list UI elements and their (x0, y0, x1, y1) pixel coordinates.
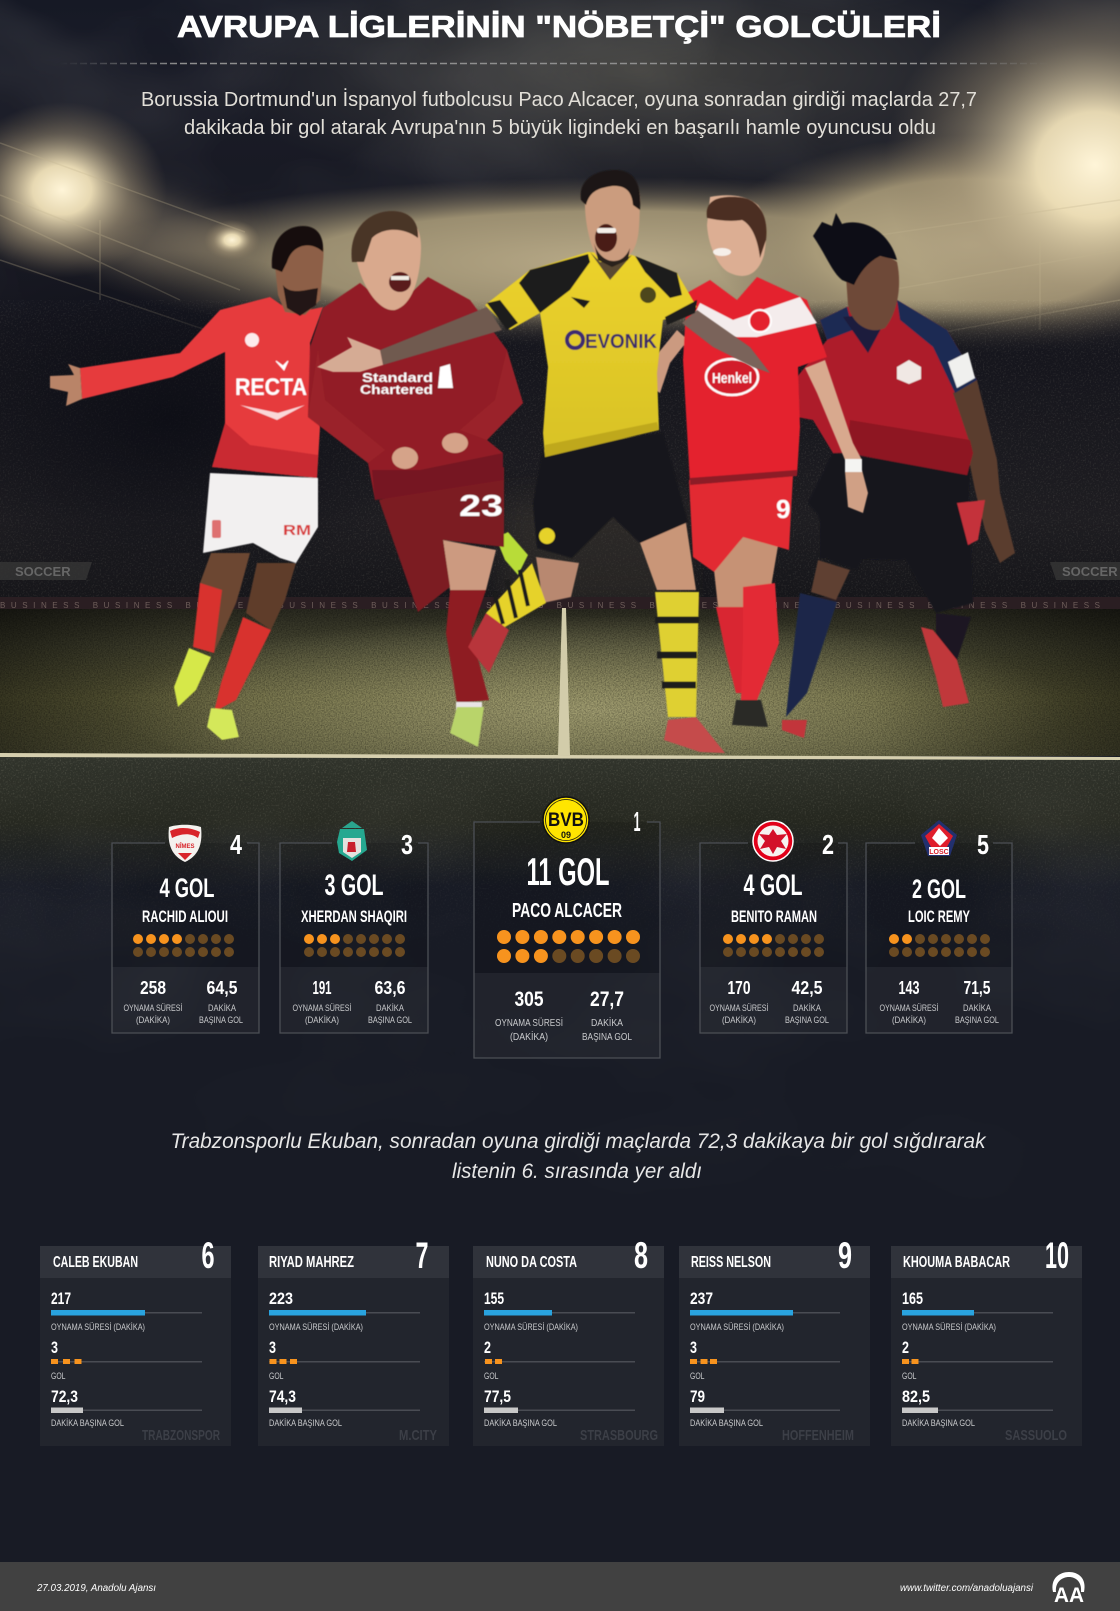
intro text (141, 88, 977, 139)
goal dots (889, 934, 990, 957)
player name: XHERDAN SHAQIRI (301, 907, 407, 926)
player: Rachid Alioui (50, 226, 324, 740)
stats (880, 977, 999, 1026)
player: Benito Raman: Henkel (712, 370, 752, 387)
icon: Nimes badge: NÎMES (175, 842, 195, 850)
player name: LOIC REMY (908, 907, 970, 926)
stats: 64,5 (206, 977, 238, 998)
bar: minutes per goal: DAKİKA BAŞINA GOL (51, 1418, 124, 1429)
club name: HOFFENHEIM (782, 1427, 854, 1444)
bar: goals (484, 1339, 635, 1382)
stats: DAKİKA (793, 1003, 822, 1014)
bar: playing time (690, 1290, 840, 1333)
stats: (DAKİKA) (510, 1030, 548, 1043)
background: stadium, lights and pitch: SOCCER (15, 564, 71, 579)
club name: TRABZONSPOR (142, 1427, 220, 1444)
twitter url: www.twitter.com/anadoluajansi (900, 1583, 1034, 1594)
icon: Nimes badge (169, 825, 201, 862)
player name: RACHID ALIOUI (142, 907, 228, 926)
bar: playing time: OYNAMA SÜRESİ (DAKİKA) (690, 1322, 784, 1333)
bar: minutes per goal: 74,3 (269, 1388, 296, 1406)
stats: 71,5 (964, 977, 990, 998)
stats: DAKİKA (208, 1003, 237, 1014)
bar: goals: GOL (690, 1371, 704, 1382)
bar: goals (51, 1339, 202, 1382)
bar: playing time (269, 1290, 420, 1333)
bar: goals: 2 (484, 1339, 491, 1357)
bar: minutes per goal (690, 1388, 840, 1429)
icon: Liverpool badge (337, 821, 367, 861)
bar: playing time: OYNAMA SÜRESİ (DAKİKA) (269, 1322, 363, 1333)
bar: goals: 3 (51, 1339, 58, 1357)
stats (124, 977, 243, 1026)
stats: OYNAMA SÜRESİ (124, 1003, 182, 1014)
panel: card rank 7 Riyad Mahrez (258, 1235, 449, 1446)
player: Loic Remy (782, 213, 1015, 738)
bar: playing time (484, 1290, 635, 1333)
player: Xherdan Shaqiri: 23 (459, 488, 503, 523)
panel: card rank 1 Paco Alcacer: 1 (634, 806, 640, 837)
icon: Lille badge: LOSC (929, 849, 949, 856)
stats: 143 (898, 977, 920, 998)
bar: minutes per goal: DAKİKA BAŞINA GOL (484, 1418, 557, 1429)
rank number: 7 (416, 1235, 428, 1276)
player name: NUNO DA COSTA (486, 1254, 577, 1271)
stats: 305 (514, 988, 544, 1011)
club name: M.CITY (399, 1427, 437, 1444)
background: stadium, lights and pitch: BUSINESS BUSINESS BUSINESS BUSINESS BUSINESS BUSINESS BUSINESS BUSINESS BUSINESS BUSINESS BUSINESS BUSINESS (0, 601, 1100, 610)
panel: card rank 6 Caleb Ekuban (40, 1235, 231, 1446)
bar: goals: GOL (902, 1371, 916, 1382)
bar: minutes per goal: 72,3 (51, 1388, 78, 1406)
panel: card rank 9 Reiss Nelson (679, 1235, 870, 1446)
player name: RIYAD MAHREZ (269, 1254, 354, 1271)
bar: goals: GOL (484, 1371, 498, 1382)
bar: goals (269, 1339, 420, 1382)
bar: playing time: 237 (690, 1290, 713, 1308)
bar: playing time (902, 1290, 1053, 1333)
club name: SASSUOLO (1005, 1427, 1067, 1444)
icon: Lille badge (921, 820, 957, 856)
bar: playing time: OYNAMA SÜRESİ (DAKİKA) (51, 1322, 145, 1333)
bar: minutes per goal: DAKİKA BAŞINA GOL (269, 1418, 342, 1429)
stats (710, 977, 829, 1026)
stats: 27,7 (590, 988, 624, 1011)
stats: 42,5 (792, 977, 822, 998)
player name: KHOUMA BABACAR (903, 1254, 1010, 1271)
icon: BVB badge: 09 (561, 830, 571, 840)
goal dots (133, 934, 234, 957)
title: AVRUPA LİGLERİNİN "NÖBETÇİ" GOLCÜLERİ (177, 9, 941, 44)
goals: 3 GOL (324, 869, 384, 902)
stats: 258 (140, 977, 166, 998)
panel: card rank 10 Khouma Babacar (891, 1235, 1082, 1446)
stats: DAKİKA (376, 1003, 405, 1014)
bar: goals: 2 (902, 1339, 909, 1357)
player: Xherdan Shaqiri: Standard (362, 370, 433, 385)
bar: playing time: 217 (51, 1290, 71, 1308)
dashed divider (60, 62, 1050, 64)
bar: playing time: 223 (269, 1290, 293, 1308)
goals: 11 GOL (526, 851, 610, 894)
date and source: 27.03.2019, Anadolu Ajansı (36, 1583, 156, 1594)
bar: playing time (51, 1290, 202, 1333)
panel: card rank 1 Paco Alcacer (474, 797, 660, 1058)
player: Benito Raman: 9 (776, 494, 790, 524)
goal dots (304, 934, 405, 957)
stats (292, 977, 412, 1026)
rank number: 8 (634, 1235, 648, 1276)
stats: 63,6 (374, 977, 406, 998)
bar: minutes per goal (51, 1388, 202, 1429)
rank number: 5 (977, 829, 989, 860)
player: Rachid Alioui: RECTA (235, 374, 307, 401)
stats: OYNAMA SÜRESİ (710, 1003, 768, 1014)
player: Rachid Alioui: RM (283, 522, 311, 539)
stats: 191 (312, 977, 332, 998)
background: stadium, lights and pitch (0, 0, 1120, 940)
player: Xherdan Shaqiri (308, 211, 528, 747)
bar: playing time: OYNAMA SÜRESİ (DAKİKA) (902, 1322, 996, 1333)
panel: card rank 4 Rachid Alioui (112, 825, 259, 1033)
bar: minutes per goal: DAKİKA BAŞINA GOL (690, 1418, 763, 1429)
bar: goals: GOL (51, 1371, 66, 1382)
panel: card rank 8 Nuno Da Costa (473, 1235, 664, 1446)
bar: minutes per goal: DAKİKA BAŞINA GOL (902, 1418, 975, 1429)
bar: playing time: OYNAMA SÜRESİ (DAKİKA) (484, 1322, 578, 1333)
stats: OYNAMA SÜRESİ (292, 1003, 352, 1014)
player: Paco Alcacer (317, 170, 770, 753)
icon: BVB badge (543, 797, 589, 843)
club name: STRASBOURG (580, 1427, 658, 1444)
bar: minutes per goal: 79 (690, 1388, 705, 1406)
stats: (DAKİKA) (892, 1015, 926, 1026)
footer bar (0, 1562, 1120, 1611)
stats: BAŞINA GOL (955, 1015, 999, 1026)
icon: AA logo: AA (1054, 1584, 1084, 1607)
panel: card rank 3 Xherdan Shaqiri (280, 821, 428, 1033)
rank number: 4 (230, 829, 242, 860)
stats: DAKİKA (591, 1016, 623, 1029)
stats: BAŞINA GOL (199, 1015, 243, 1026)
player: Paco Alcacer: EVONIK (585, 331, 658, 353)
bar: goals: GOL (269, 1371, 284, 1382)
intro text: Borussia Dortmund'un İspanyol futbolcusu Paco Alcacer, oyuna sonradan girdiği maçlarda 27,7 (141, 88, 977, 111)
player name: PACO ALCACER (512, 900, 622, 922)
players photo group (50, 170, 1015, 753)
panel: card rank 5 Loic Remy (866, 820, 1012, 1033)
icon: BVB badge: BVB (548, 810, 584, 831)
rank number: 9 (838, 1235, 852, 1276)
secondary text: Ekuban note: listenin 6. sırasında yer aldı (452, 1160, 702, 1183)
stats: BAŞINA GOL (582, 1031, 632, 1043)
bar: minutes per goal (269, 1388, 420, 1429)
player name: BENITO RAMAN (731, 907, 817, 926)
goal dots (497, 930, 640, 963)
stats: 170 (728, 977, 750, 998)
bar: minutes per goal (902, 1388, 1053, 1429)
stats: BAŞINA GOL (785, 1015, 829, 1026)
bar: minutes per goal (484, 1388, 635, 1429)
goals: 4 GOL (160, 873, 214, 903)
stats: BAŞINA GOL (368, 1015, 412, 1026)
rank number: 3 (401, 829, 413, 860)
rank number: 6 (202, 1235, 214, 1276)
bar: goals: 3 (690, 1339, 697, 1357)
player name: CALEB EKUBAN (53, 1254, 138, 1271)
icon: AA logo (1052, 1572, 1085, 1607)
goal dots (723, 934, 824, 957)
bar: goals (902, 1339, 1053, 1382)
stats: DAKİKA (963, 1003, 992, 1014)
background: stadium, lights and pitch: SOCCER (1062, 564, 1118, 579)
player name: REISS NELSON (691, 1254, 771, 1271)
panel: card rank 2 Benito Raman (700, 821, 847, 1033)
bar: minutes per goal: 77,5 (484, 1388, 511, 1406)
stats: OYNAMA SÜRESİ (880, 1003, 938, 1014)
bar: playing time: 165 (902, 1290, 923, 1308)
goals: 2 GOL (912, 874, 966, 904)
stats: (DAKİKA) (136, 1015, 170, 1026)
stats (495, 988, 632, 1043)
player: Xherdan Shaqiri: Chartered (360, 382, 433, 397)
bar: playing time: 155 (484, 1290, 504, 1308)
bar: goals (690, 1339, 840, 1382)
bar: minutes per goal: 82,5 (902, 1388, 930, 1406)
bar: goals: 3 (269, 1339, 276, 1357)
icon: Frankfurt badge (753, 821, 793, 861)
rank number: 10 (1045, 1235, 1069, 1276)
secondary text: Ekuban note: Trabzonsporlu Ekuban, sonradan oyuna girdiği maçlarda 72,3 dakikaya bir gol sığdırarak (170, 1130, 987, 1153)
stats: (DAKİKA) (722, 1015, 756, 1026)
rank number: 2 (822, 829, 834, 860)
goals: 4 GOL (744, 869, 802, 902)
stats: OYNAMA SÜRESİ (495, 1016, 563, 1029)
secondary text: Ekuban note (170, 1130, 987, 1183)
player: Benito Raman (650, 195, 868, 727)
intro text: dakikada bir gol atarak Avrupa'nın 5 büyük ligindeki en başarılı hamle oyuncusu oldu (184, 117, 936, 139)
stats: (DAKİKA) (305, 1015, 339, 1026)
